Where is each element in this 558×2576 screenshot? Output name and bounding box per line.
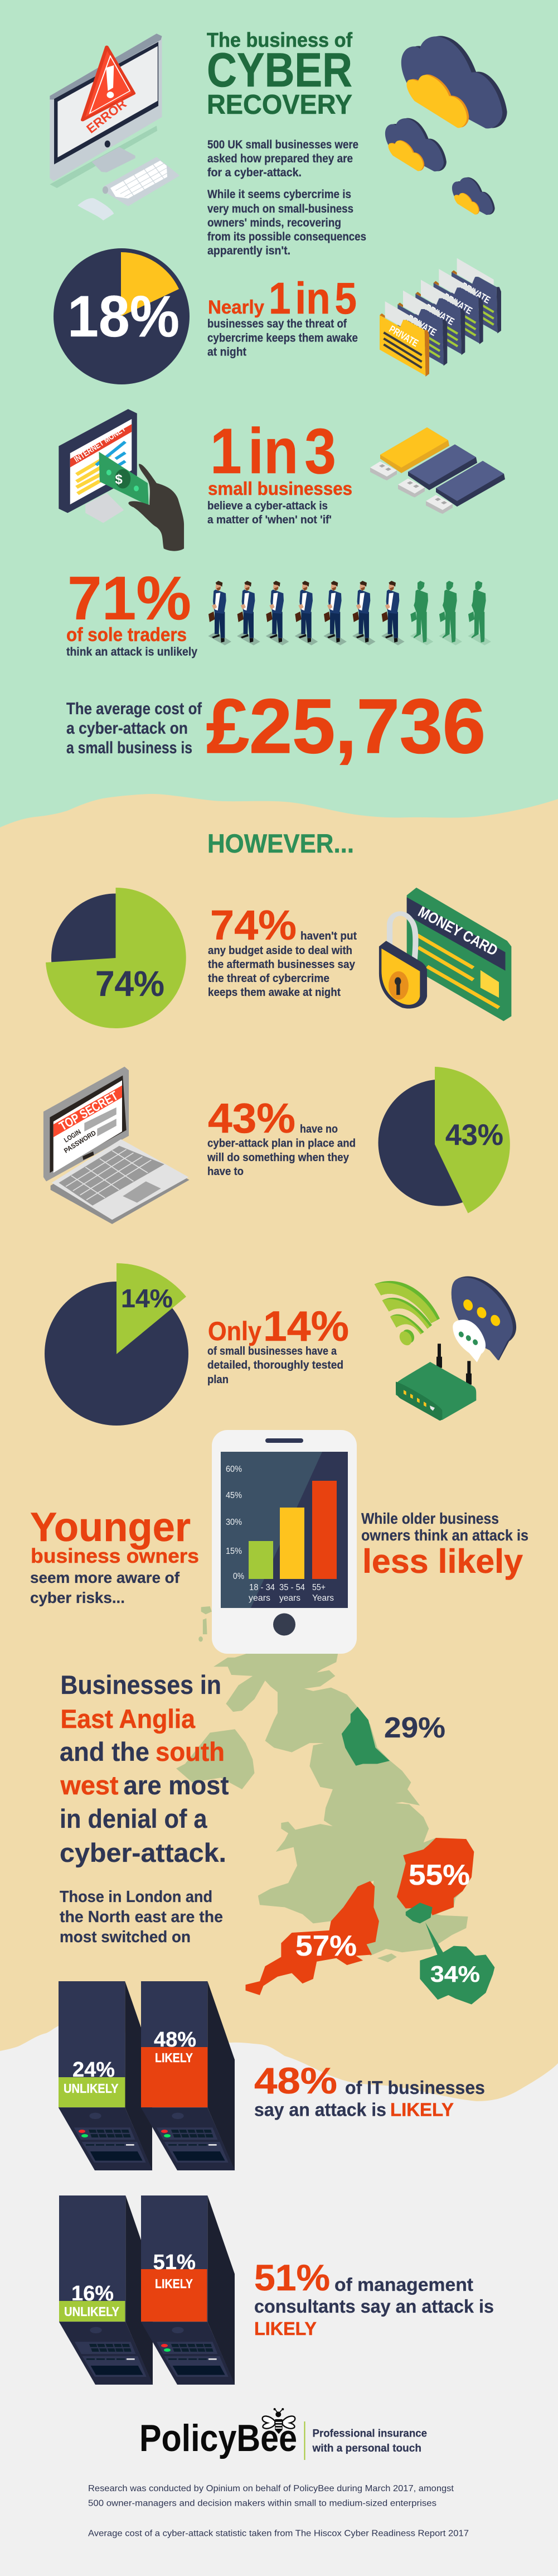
stat text: 48% of IT businesses: 48%	[254, 2060, 337, 2101]
text: ERROR on monitor: ERROR	[84, 96, 129, 136]
server: consultants likely 51%: 51%	[153, 2251, 196, 2274]
text: older business owners: While older business	[361, 1510, 499, 1527]
background: grey bottom section	[0, 837, 558, 2576]
stat text: 48% of IT businesses	[254, 2060, 485, 2120]
pie chart: 74%: 74%	[95, 964, 164, 1004]
stat text: average cost of an attack: a cyber-attack on	[66, 719, 188, 738]
heading: however: HOWEVER...	[207, 829, 354, 858]
stat text: nearly 1 in 5	[207, 273, 358, 358]
text block: intro paragraph	[207, 138, 366, 257]
text block: intro paragraph: very much on small-business	[207, 203, 353, 215]
logo divider	[304, 2421, 305, 2460]
stat text: only 14%	[207, 1303, 349, 1386]
stat text: only 14%: detailed, thoroughly tested	[207, 1359, 343, 1371]
stat text: nearly 1 in 5: at night	[207, 346, 246, 358]
logo: PolicyBee with bee: PolicyBee	[139, 2417, 297, 2459]
text: younger business owners: seem more aware of	[30, 1569, 180, 1586]
stat text: 43% no plan: have to	[207, 1165, 244, 1178]
stat text: only 14%: Only	[208, 1316, 261, 1346]
text block: regional denial: Those in London and	[60, 1888, 212, 1906]
text block: regional denial: west	[60, 1770, 119, 1800]
text: older business owners: owners think an attack is	[361, 1527, 528, 1544]
chart axis labels: 18 - 34	[249, 1583, 275, 1592]
tagline	[312, 2428, 427, 2454]
pie chart: 14%	[45, 1263, 188, 1426]
stat text: 1 in 3: small businesses	[208, 478, 352, 499]
pie chart: 74%	[46, 888, 186, 1028]
stat text: 74% no budget: haven't put	[300, 930, 357, 942]
stat text: 43% no plan: have no	[300, 1123, 338, 1135]
chart axis labels: 0%	[233, 1572, 244, 1581]
server: consultants likely 51%: LIKELY	[155, 2276, 193, 2291]
stat text: 43% no plan	[207, 1095, 356, 1178]
stat text: average cost of an attack: The average cost of	[66, 700, 202, 718]
title: CYBER	[207, 44, 352, 97]
text block: regional denial: the North east are the	[60, 1908, 223, 1926]
background: mint top section	[0, 0, 558, 837]
stat text: 51% of management consultants: LIKELY	[254, 2318, 317, 2339]
icon: money card and padlock	[379, 888, 511, 1021]
title: The business of	[207, 28, 353, 51]
title: RECOVERY	[207, 90, 352, 120]
icon: USB sticks	[370, 427, 505, 514]
icon: private folders: PRIVATE	[387, 323, 420, 349]
pie chart: 18%	[54, 248, 190, 384]
title	[207, 28, 353, 120]
bar: 18-34 years	[249, 1541, 273, 1579]
stat text: 43% no plan: 43%	[208, 1095, 295, 1142]
server: IT likely 48%: 48%	[154, 2028, 196, 2052]
stat text: only 14%: 14%	[263, 1303, 349, 1350]
icon: desktop monitor with error warning	[50, 33, 179, 220]
stat text: 74% no budget: the threat of cybercrime	[208, 972, 329, 985]
text block: regional denial: cyber-attack.	[60, 1838, 226, 1867]
stat text: average cost of an attack: £25,736	[206, 683, 486, 769]
stat text: 1 in 3: believe a cyber-attack is	[207, 500, 328, 512]
text block: regional denial: in denial of a	[60, 1804, 207, 1833]
stat text: 71% of sole traders: think an attack is unlikely	[66, 646, 197, 658]
stat text: 51% of management consultants	[254, 2257, 494, 2339]
server: IT likely 48%: LIKELY	[155, 2050, 193, 2065]
chart axis labels: 45%	[226, 1491, 242, 1500]
icon: money card and padlock: MONEY CARD	[415, 903, 501, 959]
stat text: 74% no budget: keeps them awake at night	[208, 986, 341, 999]
text block: regional denial: Businesses in	[60, 1670, 221, 1699]
chart axis labels: Years	[312, 1593, 334, 1603]
map: UK regions: 34%	[430, 1961, 480, 1987]
pictogram: ten business people, seven highlighted	[208, 581, 491, 646]
stat text: 43% no plan: will do something when they	[207, 1151, 350, 1164]
map: UK regions: 29%	[384, 1712, 445, 1744]
stat text: 74% no budget: any budget aside to deal with	[208, 944, 352, 957]
text block: regional denial: south	[156, 1737, 225, 1766]
chart axis labels: 15%	[226, 1547, 242, 1556]
background: sand wavy middle section	[0, 794, 558, 2101]
footer: research notes	[88, 2484, 469, 2539]
server: consultants unlikely 16%: UNLIKELY	[64, 2304, 119, 2319]
text: younger business owners: business owners	[31, 1544, 199, 1567]
server: IT unlikely 24%: UNLIKELY	[64, 2081, 118, 2096]
map: UK regions: 57%	[295, 1930, 357, 1962]
stat text: 43% no plan: cyber-attack plan in place and	[207, 1137, 356, 1149]
text block: regional denial: East Anglia	[60, 1704, 196, 1734]
stat text: 74% no budget	[208, 902, 357, 999]
stat text: 71% of sole traders: of sole traders	[66, 624, 187, 646]
tagline: with a personal touch	[312, 2443, 421, 2454]
stat text: 1 in 3: a matter of 'when' not 'if'	[207, 514, 332, 526]
stat text: 1 in 3: 1 in 3	[210, 416, 336, 487]
stat text: 48% of IT businesses: of IT businesses	[345, 2077, 485, 2098]
chart axis labels: 30%	[226, 1518, 242, 1527]
chart axis labels: 55+	[312, 1583, 326, 1592]
chart axis labels: years	[279, 1593, 300, 1603]
text block: intro paragraph: from its possible consequences	[207, 230, 366, 243]
stat text: average cost of an attack	[66, 683, 486, 769]
stat text: 71% of sole traders	[66, 564, 197, 658]
text block: regional denial	[60, 1670, 229, 1946]
icon: laptop top secret: LOGIN	[62, 1128, 83, 1144]
text: older business owners	[361, 1510, 528, 1580]
chart axis labels: years	[249, 1593, 270, 1603]
text: younger business owners	[30, 1505, 199, 1606]
footer: research notes: Average cost of a cyber-attack statistic taken from The Hiscox Cyber Readiness Report 2017	[88, 2529, 469, 2539]
stat text: 48% of IT businesses: LIKELY	[390, 2099, 454, 2120]
stat text: 48% of IT businesses: say an attack is	[254, 2099, 386, 2120]
pie chart: 43%: 43%	[445, 1119, 503, 1152]
map: UK regions	[176, 1606, 494, 2004]
chart axis labels: 60%	[226, 1465, 242, 1474]
server: IT unlikely 24%	[59, 1981, 152, 2170]
stat text: 51% of management consultants: 51%	[254, 2257, 330, 2298]
pie chart: 18%: 18%	[67, 284, 179, 349]
icon: laptop top secret: PASSWORD	[62, 1129, 98, 1155]
icon: laptop top secret	[43, 1067, 190, 1224]
stat text: 1 in 3	[207, 416, 352, 526]
stat text: only 14%: of small businesses have a	[207, 1345, 337, 1357]
stat text: nearly 1 in 5: businesses say the threat of	[207, 317, 347, 330]
icon: monitor, money and hand: $	[115, 472, 123, 487]
text block: intro paragraph: While it seems cybercrime is	[207, 188, 351, 201]
icon: monitor, money and hand: INTERNET MONEY	[72, 424, 128, 464]
stat text: only 14%: plan	[207, 1373, 229, 1386]
footer: research notes: Research was conducted by Opinium on behalf of PolicyBee during March 2017, amongst	[88, 2484, 454, 2493]
chart axis labels: 35 - 54	[279, 1583, 305, 1592]
footer: research notes: 500 owner-managers and decision makers within small to medium-sized enterprises	[88, 2498, 436, 2508]
icon: monitor, money and hand	[59, 409, 184, 551]
stat text: 51% of management consultants: of management	[334, 2274, 473, 2295]
chart axis labels	[226, 1465, 334, 1603]
server: consultants unlikely 16%	[59, 2195, 153, 2385]
server: IT likely 48%	[141, 1981, 235, 2170]
text block: intro paragraph: for a cyber-attack.	[207, 166, 302, 179]
server: consultants likely 51%	[141, 2195, 235, 2385]
stat text: 74% no budget: the aftermath businesses say	[208, 958, 356, 971]
icon: clouds	[385, 36, 507, 215]
text block: intro paragraph: 500 UK small businesses were	[207, 138, 358, 151]
tagline: Professional insurance	[312, 2428, 427, 2439]
pie chart: 43%	[378, 1067, 510, 1213]
icon: wifi, chat bubbles and router	[375, 1276, 516, 1421]
stat text: average cost of an attack: a small business is	[66, 739, 192, 757]
icon: private folders	[380, 258, 501, 377]
bar: 55+ years	[312, 1481, 337, 1579]
stat text: nearly 1 in 5: cybercrime keeps them awake	[207, 331, 358, 345]
map: UK regions: 55%	[409, 1859, 470, 1891]
text block: regional denial: most switched on	[60, 1928, 191, 1946]
stat text: 74% no budget: 74%	[210, 902, 297, 948]
text: younger business owners: cyber risks...	[30, 1589, 125, 1606]
smartphone with bar chart	[212, 1430, 357, 1654]
stat text: 71% of sole traders: 71%	[67, 564, 191, 633]
text block: regional denial: are most	[124, 1770, 229, 1800]
text block: intro paragraph: asked how prepared they are	[207, 152, 353, 165]
server: IT unlikely 24%: 24%	[72, 2058, 115, 2082]
bar: 35-54 years	[280, 1508, 304, 1579]
text block: intro paragraph: owners' minds, recovering	[207, 216, 341, 229]
stat text: nearly 1 in 5: Nearly	[208, 297, 264, 318]
pie chart: 14%: 14%	[121, 1284, 173, 1313]
icon: laptop top secret: TOP SECRET	[57, 1088, 120, 1133]
text: older business owners: less likely	[362, 1543, 523, 1580]
text block: regional denial: and the	[60, 1737, 149, 1766]
server: consultants unlikely 16%: 16%	[71, 2282, 114, 2305]
text block: intro paragraph: apparently isn't.	[207, 244, 290, 257]
stat text: 51% of management consultants: consultants say an attack is	[254, 2296, 494, 2317]
stat text: nearly 1 in 5: 1 in 5	[269, 273, 357, 323]
text: younger business owners: Younger	[30, 1505, 191, 1550]
